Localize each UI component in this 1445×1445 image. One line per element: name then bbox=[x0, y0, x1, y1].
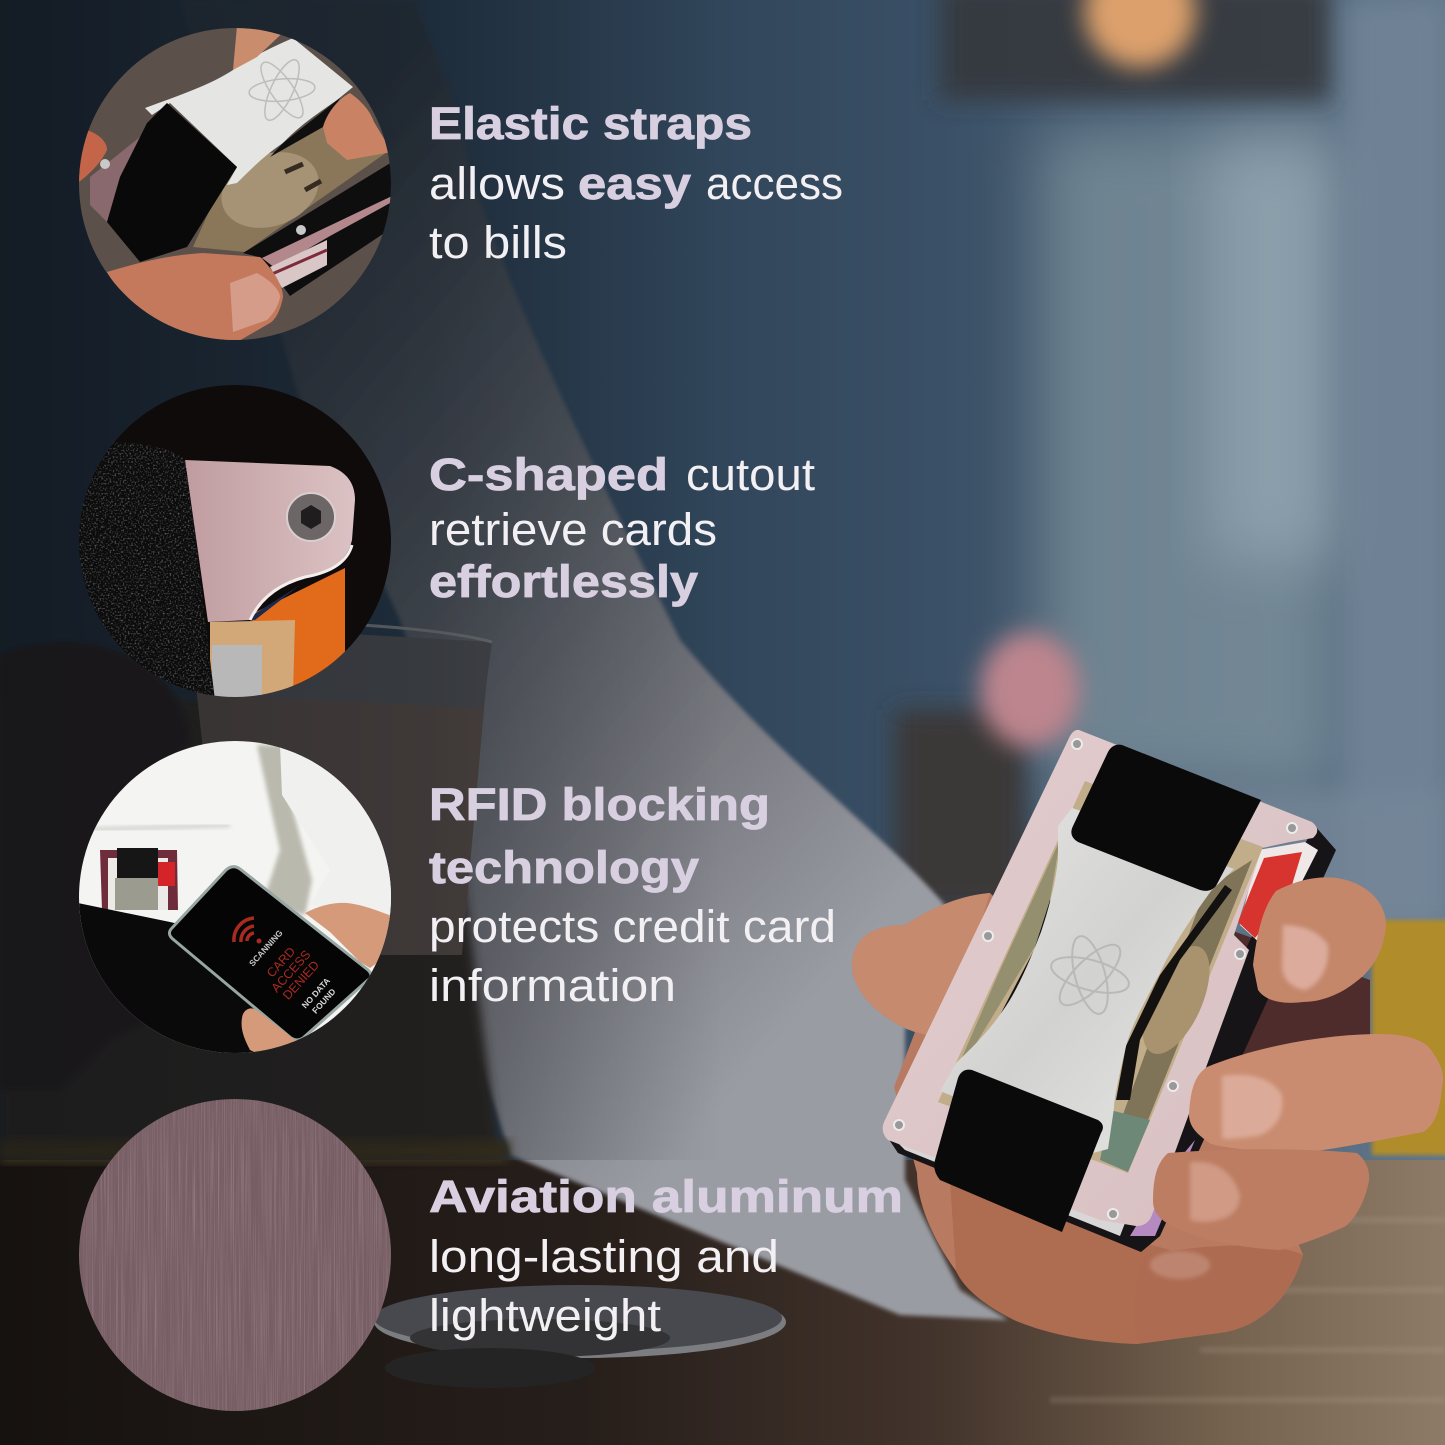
text block: elastic straps: Elastic straps bbox=[429, 98, 752, 149]
text block: RFID blocking technology: protects credit card bbox=[429, 901, 836, 952]
text block: RFID blocking technology bbox=[429, 779, 836, 1011]
phone screen text: ACCESS bbox=[269, 948, 313, 995]
finger nails bbox=[1150, 925, 1328, 1279]
wifi icon bbox=[234, 918, 254, 942]
banknote with portrait bbox=[193, 120, 390, 252]
left hand silhouette bbox=[0, 642, 195, 1090]
pinky finger bbox=[1134, 1246, 1303, 1344]
hand holding wallet (palm and thumb) bbox=[852, 893, 1370, 1344]
phone screen text: CARD bbox=[264, 944, 298, 980]
circle 4: aviation aluminum texture bbox=[79, 1099, 391, 1411]
wallet bbox=[883, 730, 1336, 1252]
black strap bbox=[107, 103, 237, 262]
fingers bbox=[323, 93, 392, 160]
middle finger bbox=[1189, 1034, 1443, 1153]
elastic strap top bbox=[1071, 745, 1261, 891]
phone screen text: DENIED bbox=[280, 958, 322, 1003]
atom logo bbox=[248, 55, 316, 125]
text block: elastic straps: easy bbox=[578, 158, 691, 209]
black mesh bbox=[168, 460, 214, 696]
text block: aviation aluminum bbox=[429, 1171, 903, 1341]
table bbox=[0, 1160, 1445, 1445]
phone screen text: NO DATA bbox=[300, 976, 332, 1010]
saucer bbox=[374, 1286, 786, 1358]
phone screen text: FOUND bbox=[310, 986, 338, 1016]
silver clip bbox=[145, 38, 353, 185]
text block: C-shaped cutout: effortlessly bbox=[429, 556, 698, 607]
dark lower-left area bbox=[0, 700, 500, 1160]
text block: aviation aluminum: Aviation aluminum bbox=[429, 1171, 903, 1222]
text block: RFID blocking technology: RFID blocking bbox=[429, 779, 770, 830]
atom logo bbox=[1047, 932, 1133, 1018]
text block: aviation aluminum: lightweight bbox=[429, 1290, 662, 1341]
shirt sleeve bbox=[180, 0, 1008, 1320]
hand shadow behind fingers bbox=[1140, 930, 1370, 1230]
circle 2: C-shaped cutout photo bbox=[79, 385, 391, 700]
wallet body bbox=[243, 162, 392, 296]
red card bbox=[1238, 852, 1302, 938]
elastic strap bottom bbox=[934, 1070, 1103, 1232]
phone screen text: SCANNING bbox=[247, 928, 285, 968]
circle 3: RFID blocking photo bbox=[78, 741, 395, 1060]
yellow chair bbox=[1372, 920, 1445, 1155]
text block: C-shaped cutout: cutout bbox=[686, 449, 816, 500]
text block: RFID blocking technology: technology bbox=[429, 842, 699, 893]
index finger bbox=[1253, 877, 1386, 1003]
text block: elastic straps: allows bbox=[429, 158, 565, 209]
brushed plate with C cutout bbox=[185, 460, 355, 622]
text block: C-shaped cutout bbox=[429, 449, 816, 607]
glass of coffee bbox=[190, 630, 490, 955]
fingers bbox=[1134, 877, 1443, 1344]
text block: RFID blocking technology: information bbox=[429, 960, 676, 1011]
text block: elastic straps: to bills bbox=[429, 217, 567, 268]
text block: C-shaped cutout: retrieve cards bbox=[429, 504, 717, 555]
pocket bbox=[78, 903, 300, 1060]
text block: elastic straps bbox=[429, 98, 843, 268]
phone screen text bbox=[250, 930, 335, 1014]
screws bbox=[894, 739, 1297, 1219]
phone bbox=[169, 867, 371, 1040]
text block: elastic straps: access bbox=[706, 158, 843, 209]
text block: C-shaped cutout: C-shaped bbox=[429, 449, 668, 500]
wallet in pocket bbox=[100, 850, 178, 910]
text block: aviation aluminum: long-lasting and bbox=[429, 1231, 779, 1282]
ring finger bbox=[1153, 1149, 1369, 1250]
metal plate bbox=[883, 730, 1317, 1226]
card stack bbox=[888, 826, 1336, 1252]
dark gaps beside clip bbox=[1116, 885, 1232, 1100]
circle 1: elastic straps photo bbox=[76, 26, 392, 342]
banknote bbox=[938, 781, 1263, 1173]
silver clip bbox=[940, 808, 1234, 1153]
